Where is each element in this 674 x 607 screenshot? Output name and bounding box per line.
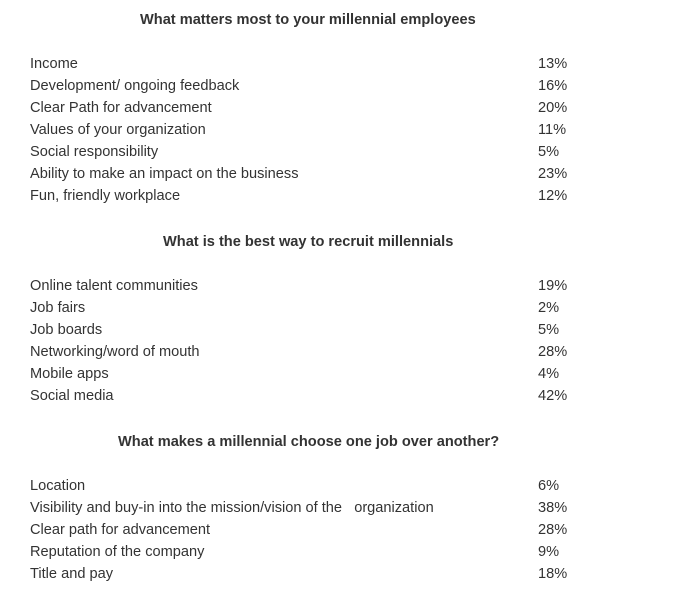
- list: best way to recruit: 42%: [538, 388, 567, 404]
- list: best way to recruit: Job fairs: [30, 300, 85, 316]
- list: what matters most: Fun, friendly workplace: [30, 188, 180, 204]
- list: best way to recruit: [30, 278, 567, 404]
- list: what matters most: 11%: [538, 122, 566, 138]
- list: best way to recruit: 5%: [538, 322, 559, 338]
- list: best way to recruit: 2%: [538, 300, 559, 316]
- list: best way to recruit: Social media: [30, 388, 114, 404]
- list: best way to recruit: Online talent communities: [30, 278, 198, 294]
- heading: best way to recruit: What is the best way to recruit millennials: [163, 234, 453, 250]
- list: what matters most: 12%: [538, 188, 567, 204]
- list: choose one job over another: [30, 478, 567, 582]
- list: what matters most: Income: [30, 56, 78, 72]
- list: choose one job over another: 9%: [538, 544, 559, 560]
- list: what matters most: 16%: [538, 78, 567, 94]
- list: choose one job over another: 38%: [538, 500, 567, 516]
- list: what matters most: Development/ ongoing feedback: [30, 78, 239, 94]
- list: best way to recruit: 28%: [538, 344, 567, 360]
- heading: choose one job over another: What makes a millennial choose one job over another?: [118, 434, 499, 450]
- list: best way to recruit: Mobile apps: [30, 366, 109, 382]
- list: what matters most: 13%: [538, 56, 567, 72]
- list: what matters most: Values of your organization: [30, 122, 206, 138]
- list: choose one job over another: 18%: [538, 566, 567, 582]
- list: what matters most: Ability to make an impact on the business: [30, 166, 299, 182]
- list: what matters most: 5%: [538, 144, 559, 160]
- list: choose one job over another: Visibility and buy-in into the mission/vision of the organization: [30, 500, 434, 516]
- list: choose one job over another: Location: [30, 478, 85, 494]
- list: what matters most: 20%: [538, 100, 567, 116]
- list: choose one job over another: 28%: [538, 522, 567, 538]
- list: choose one job over another: Title and pay: [30, 566, 113, 582]
- list: what matters most: Social responsibility: [30, 144, 158, 160]
- list: what matters most: [30, 56, 567, 204]
- list: what matters most: Clear Path for advancement: [30, 100, 212, 116]
- list: best way to recruit: Networking/word of mouth: [30, 344, 200, 360]
- list: choose one job over another: Reputation of the company: [30, 544, 204, 560]
- list: what matters most: 23%: [538, 166, 567, 182]
- heading: what matters most: What matters most to your millennial employees: [140, 12, 476, 28]
- list: best way to recruit: Job boards: [30, 322, 102, 338]
- list: choose one job over another: Clear path for advancement: [30, 522, 210, 538]
- list: choose one job over another: 6%: [538, 478, 559, 494]
- list: best way to recruit: 4%: [538, 366, 559, 382]
- list: best way to recruit: 19%: [538, 278, 567, 294]
